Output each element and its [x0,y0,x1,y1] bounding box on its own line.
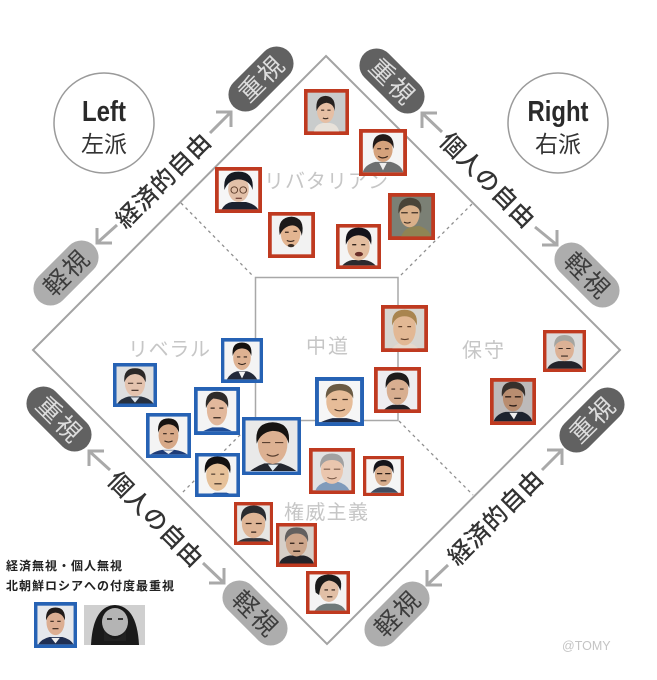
pill: bottom-left important [19,379,99,459]
pill: bottom-right important [552,380,632,460]
portrait: red frame, man with round glasses [217,169,260,211]
side note text [6,558,175,593]
portrait: red frame, man with open mouth [338,226,379,267]
portrait: red frame, man with short dark hair, centre right [376,369,419,411]
portrait: red frame, man with shaggy hair at bottom [308,573,348,612]
portrait: red frame, older man with glasses on grey-green backdrop [390,195,433,238]
pill: top-right dismissed [547,235,627,315]
portrait: blue frame, smiling round-faced man, centre [317,379,362,424]
pill: top-left important: 重視 [233,50,291,108]
portrait: blue frame, smiling man at liberal top [223,340,261,381]
quadrant label: liberal: リベラル [128,339,210,361]
pill: top-right important: 重視 [363,53,421,111]
pill: top-left dismissed [26,233,106,313]
side note text: 経済無視・個人無視 [6,558,123,573]
main diamond [33,56,620,644]
quadrant label: conservative: 保守 [462,339,504,362]
axis bottom-left: individual freedom: 個人の自由 [102,467,208,573]
watermark: @TOMY [562,639,611,653]
pill: bottom-right dismissed: 軽視 [369,585,427,643]
axis top-right: individual freedom [352,41,627,315]
axis bottom-right: economic freedom [357,380,632,654]
badge: Left [54,73,154,173]
pill: bottom-left important: 重視 [30,391,88,449]
portrait: blue frame, man with side-parted grey-black hair [196,389,238,433]
portrait: blue frame, large central prime minister [244,419,299,473]
portrait: red frame, grey-haired man, far right [545,332,584,370]
portrait: blue frame, round-faced man [197,455,238,495]
axis bottom-right: economic freedom: 経済的自由 [443,465,549,571]
pill: top-right dismissed: 軽視 [558,247,616,305]
side note text: 北朝鮮ロシアへの付度最重視 [6,578,175,593]
badge: Left: Left [82,96,126,128]
badge: Left: 左派 [81,131,127,157]
portrait: red frame, young man with glasses [365,458,402,494]
pill: top-right important [352,41,432,121]
axis top-right: individual freedom: 個人の自由 [434,128,540,234]
badge: Right: 右派 [535,131,581,157]
portrait: red frame, older man with glasses, right [492,380,534,423]
portrait: blue frame, man with short hair, left [148,415,189,456]
quadrant label: libertarian: リバタリアン [264,170,388,193]
pill: top-left dismissed: 軽視 [38,244,96,302]
centre square [256,278,398,420]
axis top-left: economic freedom [26,39,301,313]
portrait: red frame, top centre [306,91,347,133]
pill: bottom-left dismissed [215,573,295,653]
portrait: red frame, man with goatee [270,214,313,256]
pill: bottom-right dismissed [357,574,437,654]
axis top-left: economic freedom: 経済的自由 [111,128,217,234]
pill: bottom-left dismissed: 軽視 [226,585,284,643]
pill: top-left important [221,39,301,119]
badge: Right: Right [528,96,589,128]
portrait: red frame, blond man [383,307,426,350]
axis bottom-left: individual freedom [19,379,295,653]
portrait: red frame, grey-haired stern man [278,525,315,565]
portrait: red frame, round-faced man with glasses [236,504,271,543]
portrait: blue frame, man with grey-black hair [115,365,155,405]
portrait: red frame, upper right, smiling man in suit [361,131,405,174]
portrait: red frame, older smiling man with glasses [311,450,353,492]
badge: Right [508,73,608,173]
portrait: blue frame, side-note man [36,604,75,646]
portrait: grey long-haired man photo [84,605,145,645]
pill: bottom-right important: 重視 [564,391,622,449]
quadrant label: centrist: 中道 [306,335,348,358]
quadrant label: authoritarian: 権威主義 [284,501,368,524]
